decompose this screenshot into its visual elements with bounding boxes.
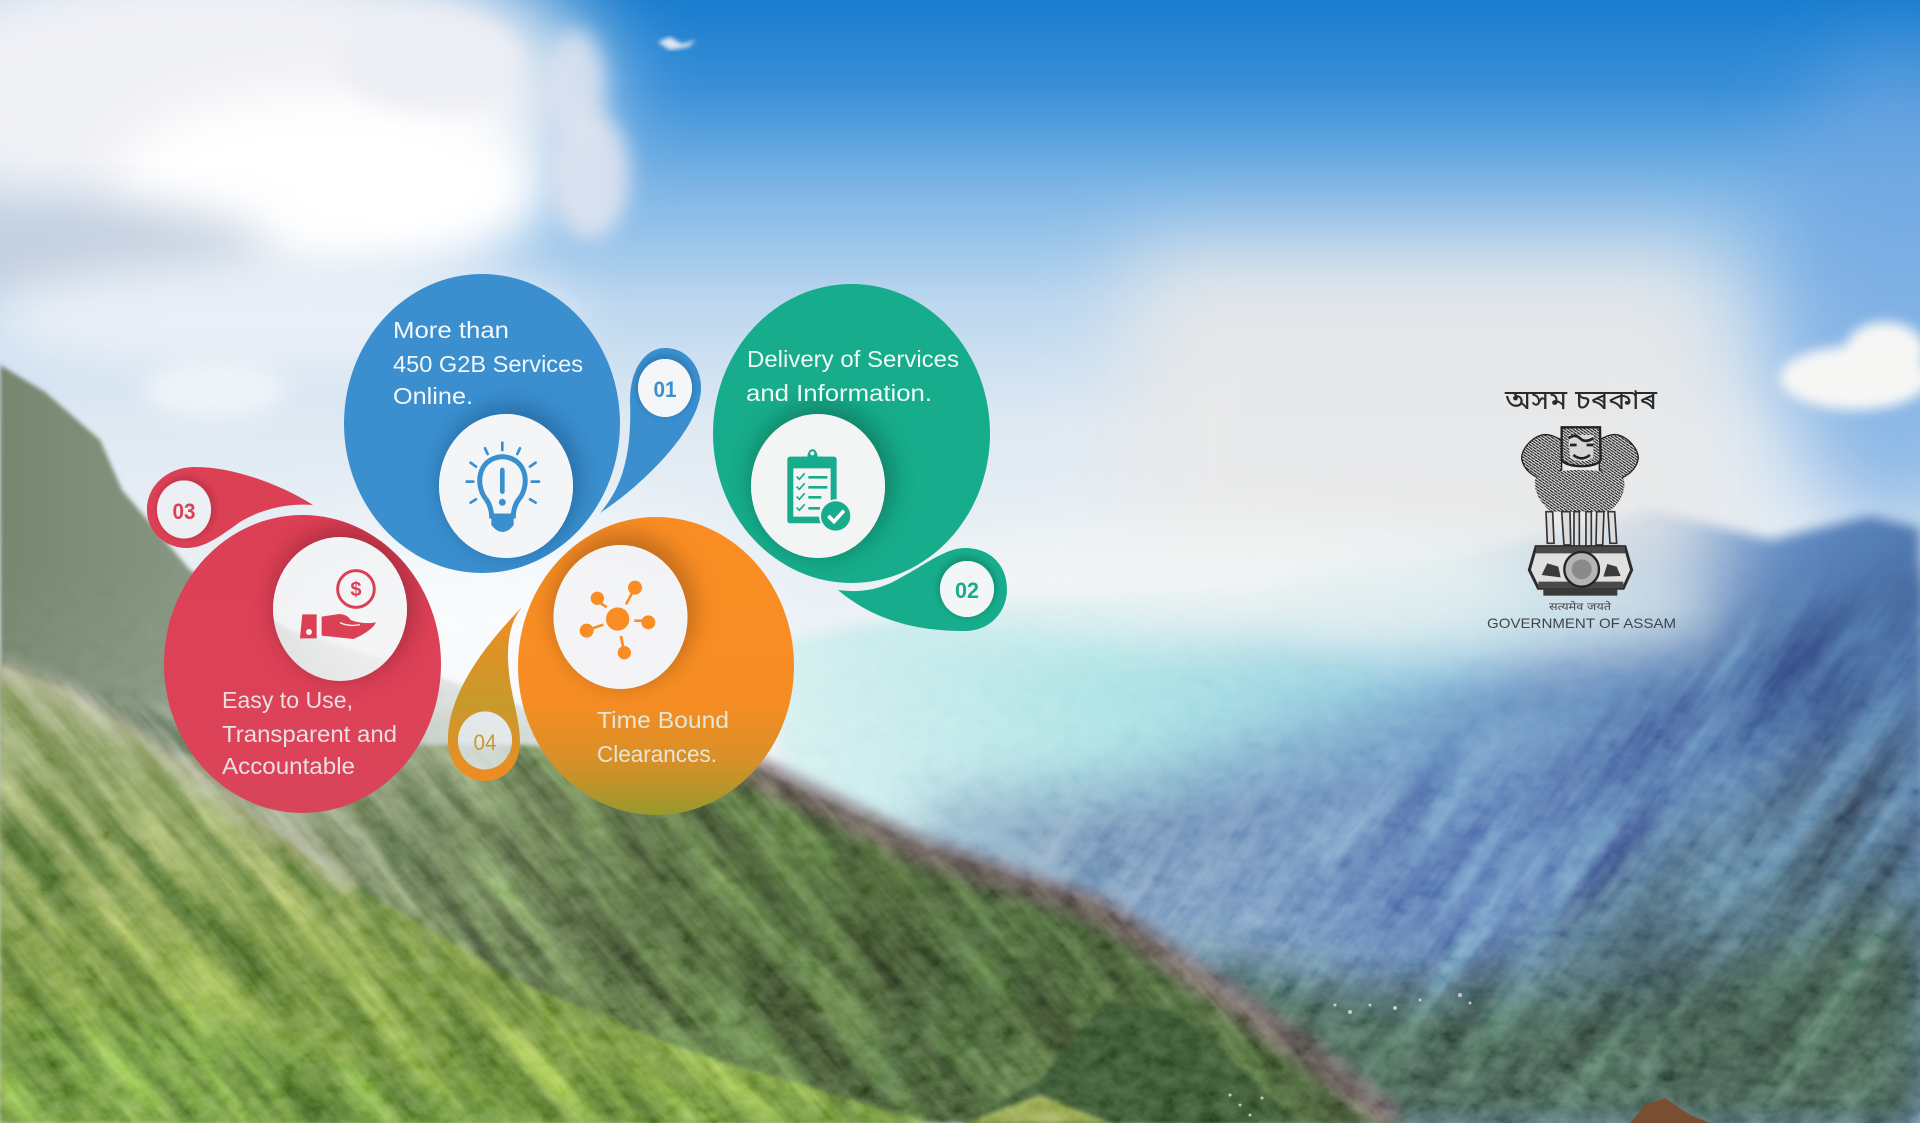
text: more than 450 G2B services online [393, 317, 583, 409]
text: easy to use, transparent and accountable: Accountable [222, 753, 355, 779]
government emblem block [1487, 385, 1676, 631]
motto: सत्यमेव जयते [1549, 601, 1611, 613]
small hill with village [960, 993, 1472, 1123]
foreground green slope [0, 665, 930, 1123]
caption: government of assam: GOVERNMENT OF ASSAM [1487, 615, 1676, 631]
rocky edge of foreground slope [0, 668, 355, 887]
orange bubble shape with pin [448, 517, 794, 815]
text: more than 450 G2B services online: 450 G2B Services [393, 351, 583, 377]
middle forested slope [0, 745, 1395, 1123]
pin circle 04 [458, 712, 512, 770]
panel: 04 orange bubble [448, 517, 794, 815]
haze over the centre [270, 520, 750, 720]
panel: 03 red bubble [147, 467, 441, 813]
text: time bound clearances [597, 707, 729, 767]
icon: clipboard with check [787, 449, 852, 533]
rock in the foreground [1630, 1098, 1710, 1123]
panel: 02 green bubble [713, 284, 1007, 631]
clouds: upper left [0, 0, 696, 418]
pin circle 01 [638, 359, 692, 417]
streaked texture on the right ridges [1028, 600, 1920, 1123]
cloud: right [1780, 322, 1920, 410]
icon: national emblem lion capital [1522, 427, 1638, 596]
texture over the forests [0, 636, 1920, 1123]
icon: network nodes [580, 581, 655, 659]
left distant mountain [0, 365, 800, 900]
text: delivery of services and information: and Information. [746, 380, 932, 406]
white circle [554, 545, 688, 689]
text: time bound clearances: Time Bound [597, 707, 729, 733]
text: delivery of services and information [746, 346, 959, 406]
text: easy to use, transparent and accountable [222, 687, 397, 779]
blue bubble shape with pin [344, 274, 701, 573]
text: delivery of services and information: Delivery of Services [747, 346, 959, 372]
panel: 01 blue bubble [344, 274, 701, 573]
number 02: 02 [955, 578, 979, 603]
streaked texture on the left slopes [0, 668, 1388, 1123]
text: easy to use, transparent and accountable: Transparent and [222, 721, 397, 747]
pin circle 03 [157, 480, 211, 538]
text: more than 450 G2B services online: More than [393, 317, 509, 343]
green bubble shape with pin [713, 284, 1007, 631]
white circle [751, 414, 885, 558]
pale veil behind the emblem [880, 250, 1720, 660]
far mountains [780, 510, 1920, 1123]
icon: hand holding coin [300, 571, 376, 639]
text: time bound clearances: Clearances. [597, 741, 717, 767]
red bubble shape with pin [147, 467, 441, 813]
text: more than 450 G2B services online: Online. [393, 383, 473, 409]
icon: hand holding coin: $ [350, 579, 362, 601]
number 01: 01 [654, 377, 676, 402]
number 03: 03 [172, 499, 196, 524]
heading: Assamese government name: অসম চৰকাৰ [1504, 385, 1658, 415]
number 04: 04 [474, 730, 496, 755]
text: easy to use, transparent and accountable: Easy to Use, [222, 687, 353, 713]
lower right ridges [1000, 570, 1920, 1123]
translucent white circle [273, 537, 407, 681]
white circle [439, 414, 573, 558]
foreground shade strip [0, 1010, 560, 1123]
pin circle 02 [940, 561, 994, 617]
icon: light bulb [467, 443, 539, 532]
